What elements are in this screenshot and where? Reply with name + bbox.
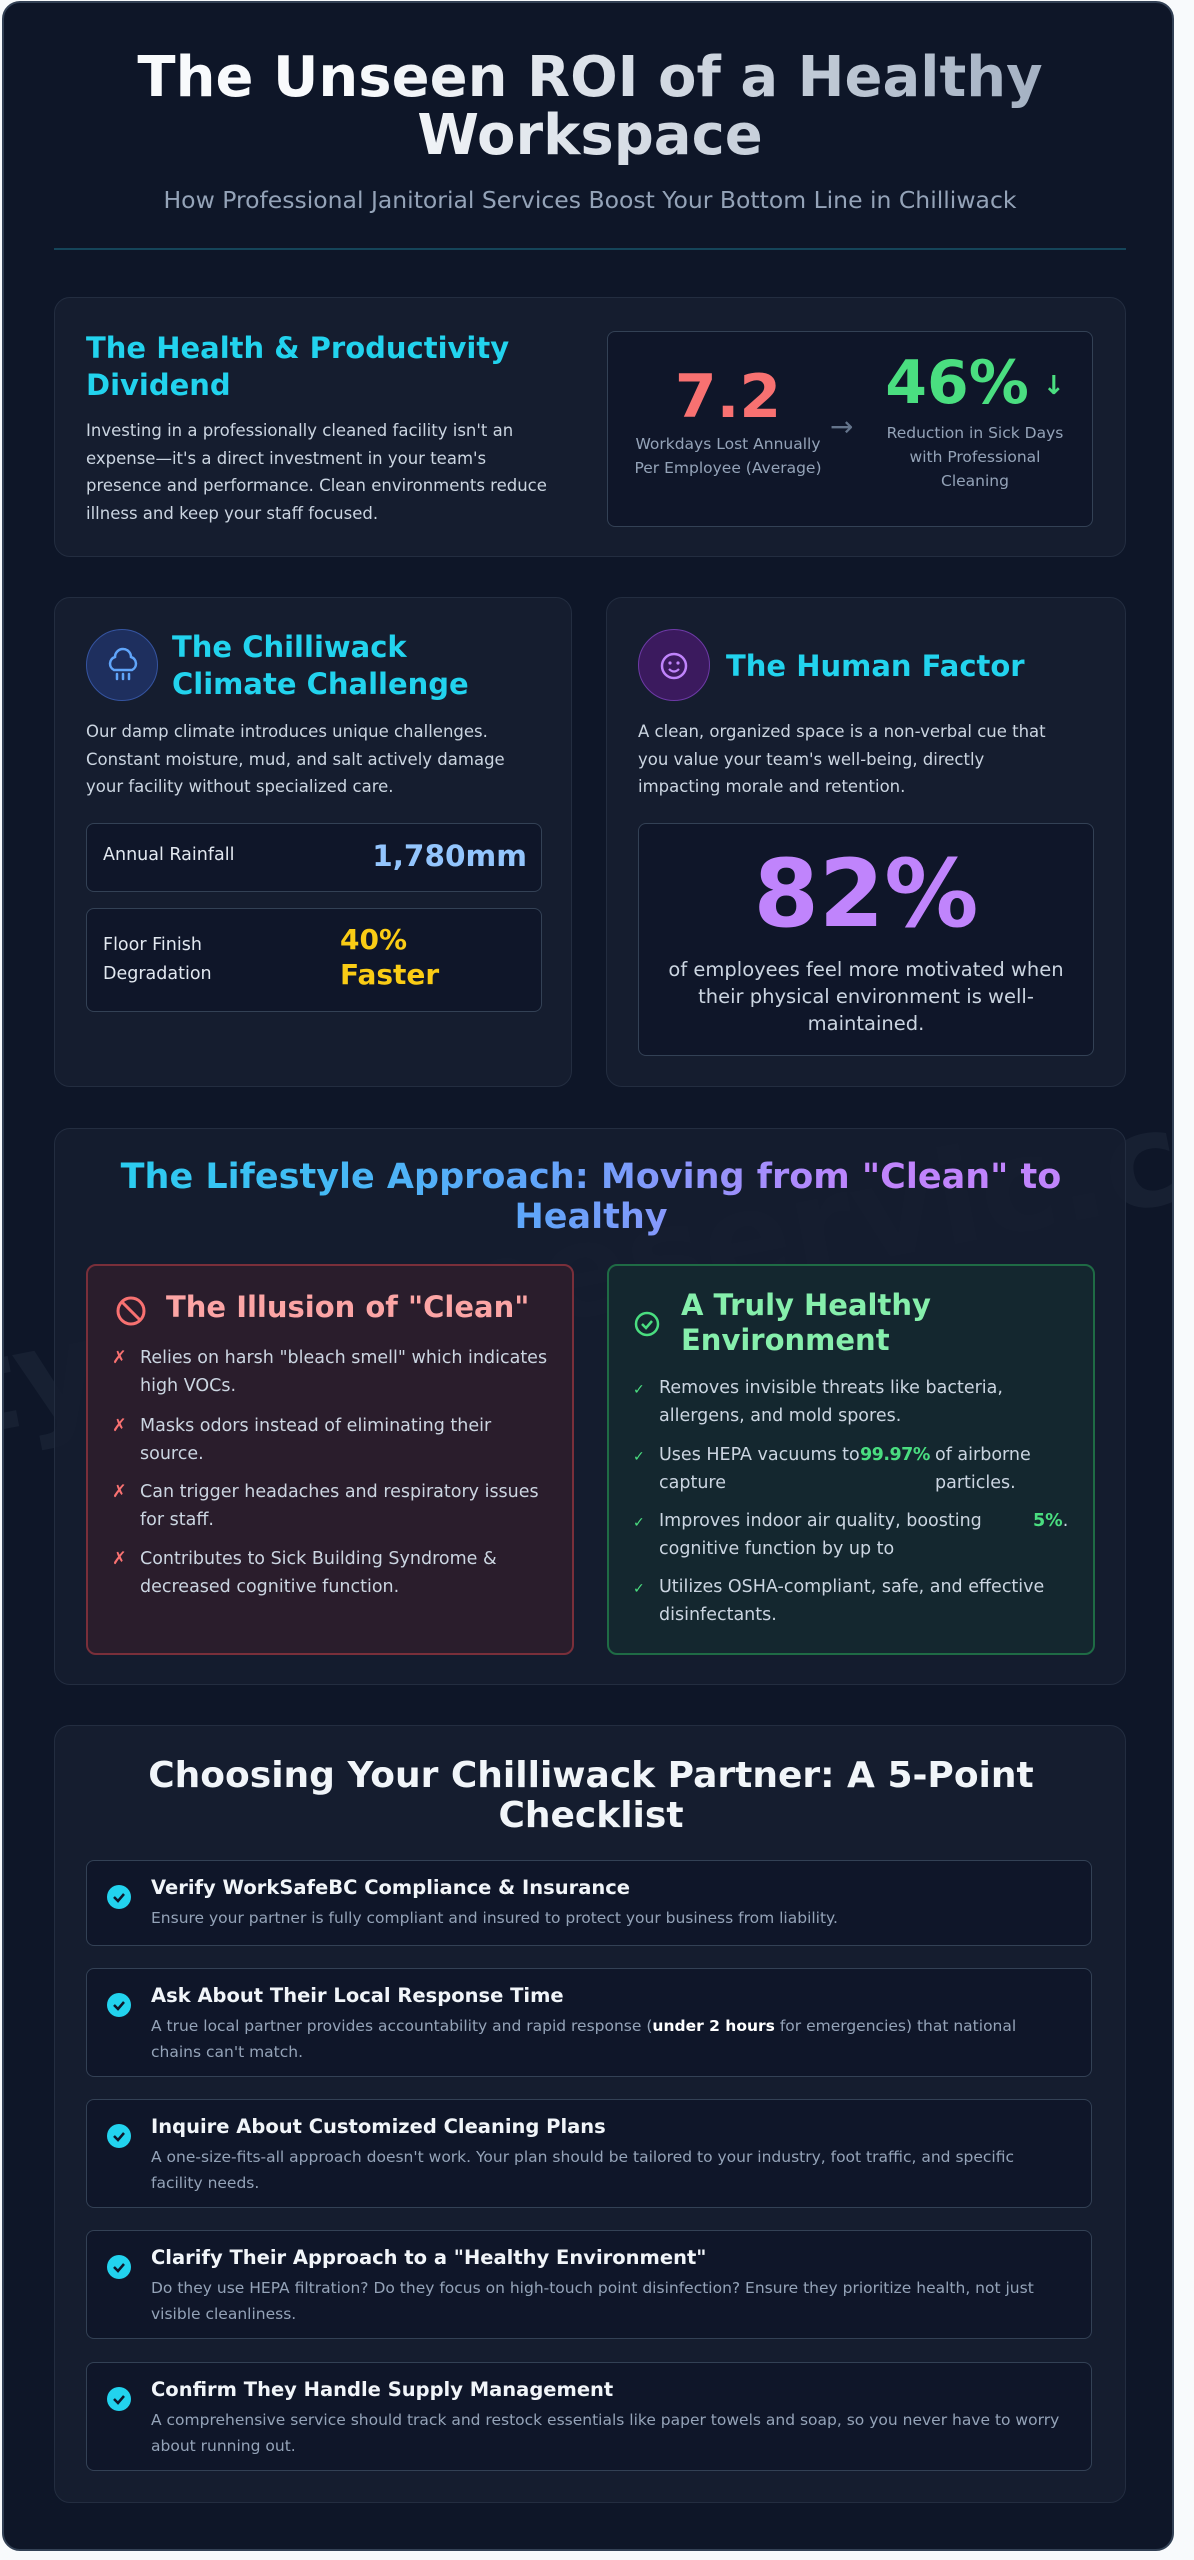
list: Improves indoor air quality, boosting cognitive function by up to [659,1511,982,1559]
title [4,49,1176,165]
list: ✗ [112,1482,127,1502]
checklist item 5: A comprehensive service should track and restock essentials like paper towels and soap, so you never have to worry about running out. [151,2411,1059,2455]
stat: 7.2: Per Employee (Average) [634,459,822,477]
checklist item 2 [86,1968,1092,2077]
checklist item 2: A true local partner provides accountability and rapid response (under 2 hours for emergencies) that national chains can't match. [151,2017,1016,2061]
heading: Checklist [498,1795,684,1836]
stat: floor finish [86,908,542,1012]
list: ✗ [112,1416,127,1436]
list: ✗ [112,1549,127,1569]
icon: check circle [634,1312,660,1336]
stat: floor finish: Floor Finish [103,935,202,955]
text block: A clean, organized space is a non-verbal cue that you value your team's well-being, directly [638,722,1046,768]
heading: The Illusion of "Clean" [166,1290,529,1324]
checklist item 3 [86,2099,1092,2208]
heading [681,1288,931,1357]
stat: 7.2 [634,362,822,477]
list: 99.97% [860,1445,930,1465]
panel: checklist [54,1725,1126,2503]
checklist item 1: Ensure your partner is fully compliant and insured to protect your business from liability. [151,1909,838,1927]
stat: floor finish: Faster [340,958,439,991]
stat box: 82%: 82% [754,840,978,949]
checklist item 3: A one-size-fits-all approach doesn't work. Your plan should be tailored to your industry, foot traffic, and specific facility needs. [151,2148,1014,2192]
text block: impacting morale and retention. [638,777,905,796]
heading [148,1755,1034,1836]
stat: rainfall [86,823,542,892]
stat: 46% [885,348,1065,490]
text block: Our damp climate introduces unique challenges. Constant moisture, mud, and salt actively damage your facility without specialized care. [86,722,505,796]
stat: 46%: with Professional [910,448,1040,466]
stat: floor finish: Degradation [103,964,212,984]
heading: Climate Challenge [172,667,469,701]
list: Can trigger headaches and respiratory issues for staff. [140,1482,539,1530]
heading: The Health & Productivity Dividend [86,331,509,402]
panel: climate challenge [54,597,572,1087]
list: ✓ [633,1515,645,1531]
panel: lifestyle approach [54,1128,1126,1685]
heading: The Human Factor [726,649,1025,683]
list: ✓ [633,1382,645,1398]
heading: Healthy [514,1197,668,1237]
subtitle: How Professional Janitorial Services Boost Your Bottom Line in Chilliwack [164,186,1016,214]
list: Removes invisible threats like bacteria, allergens, and mold spores. [659,1378,1003,1426]
checklist item 4 [86,2230,1092,2339]
heading: A Truly Healthy [681,1288,931,1322]
stat: 46%: Reduction in Sick Days [887,424,1063,442]
text block: Investing in a professionally cleaned facility isn't an expense—it's a direct investment in your team's presence and performance. Clean environments reduce illness and keep your staff focused. [86,421,547,522]
stat: 7.2: 7.2 [675,362,781,432]
checklist item 4: Do they use HEPA filtration? Do they focus on high-touch point disinfection? Ensure they prioritize health, not just visible cleanliness. [151,2279,1034,2323]
stat: rainfall: 1,780mm [372,839,527,873]
stat box: 82% [638,823,1094,1056]
list: Utilizes OSHA-compliant, safe, and effective disinfectants. [659,1577,1044,1625]
list: ✗ [112,1348,127,1368]
list [633,1378,1068,1625]
title: Workspace [417,103,763,168]
checklist item 5: Confirm They Handle Supply Management [151,2378,613,2401]
title: The Unseen ROI of a Healthy [137,45,1043,110]
arrow: → [830,410,853,443]
heading [172,630,469,701]
list: Masks odors instead of eliminating their source. [140,1416,491,1464]
list: Uses HEPA vacuums to capture [659,1445,860,1493]
heading: The Lifestyle Approach: Moving from "Clean" to [121,1157,1061,1197]
stat: 46%: 46% ↓ [885,348,1065,418]
list [112,1348,547,1597]
list: 5%. [1033,1511,1068,1531]
checklist item 3: Inquire About Customized Cleaning Plans [151,2115,606,2138]
heading: Environment [681,1323,890,1357]
heading: Choosing Your Chilliwack Partner: A 5-Point [148,1755,1034,1796]
list: ✓ [633,1581,645,1597]
checklist item 1: Verify WorkSafeBC Compliance & Insurance [151,1876,630,1899]
text block [638,722,1046,796]
checklist item 1 [86,1860,1092,1946]
card: truly healthy [607,1264,1095,1655]
checklist item 4: Clarify Their Approach to a "Healthy Environment" [151,2246,706,2269]
heading [55,1157,1127,1237]
panel: human factor [606,597,1126,1087]
stat: floor finish: 40% [340,923,407,956]
panel: health & productivity dividend [54,297,1126,557]
card: illusion of clean [86,1264,574,1655]
list: ✓ [633,1449,645,1465]
stat box [607,331,1093,527]
stat: 46%: Cleaning [941,472,1009,490]
stat: 7.2: Workdays Lost Annually [635,435,821,453]
stat box: 82%: of employees feel more motivated when their physical environment is well-maintained. [668,958,1064,1035]
list: of airborne particles. [935,1445,1031,1493]
checklist item 2: Ask About Their Local Response Time [151,1984,564,2007]
list: Relies on harsh "bleach smell" which indicates high VOCs. [140,1348,547,1396]
stat: rainfall: Annual Rainfall [103,845,234,865]
icon: cloud rain [86,629,158,701]
icon: prohibited [116,1296,146,1326]
icon: smiley [638,629,710,701]
list: Contributes to Sick Building Syndrome & decreased cognitive function. [140,1549,497,1597]
heading: The Chilliwack [172,630,407,664]
checklist item 5 [86,2362,1092,2471]
